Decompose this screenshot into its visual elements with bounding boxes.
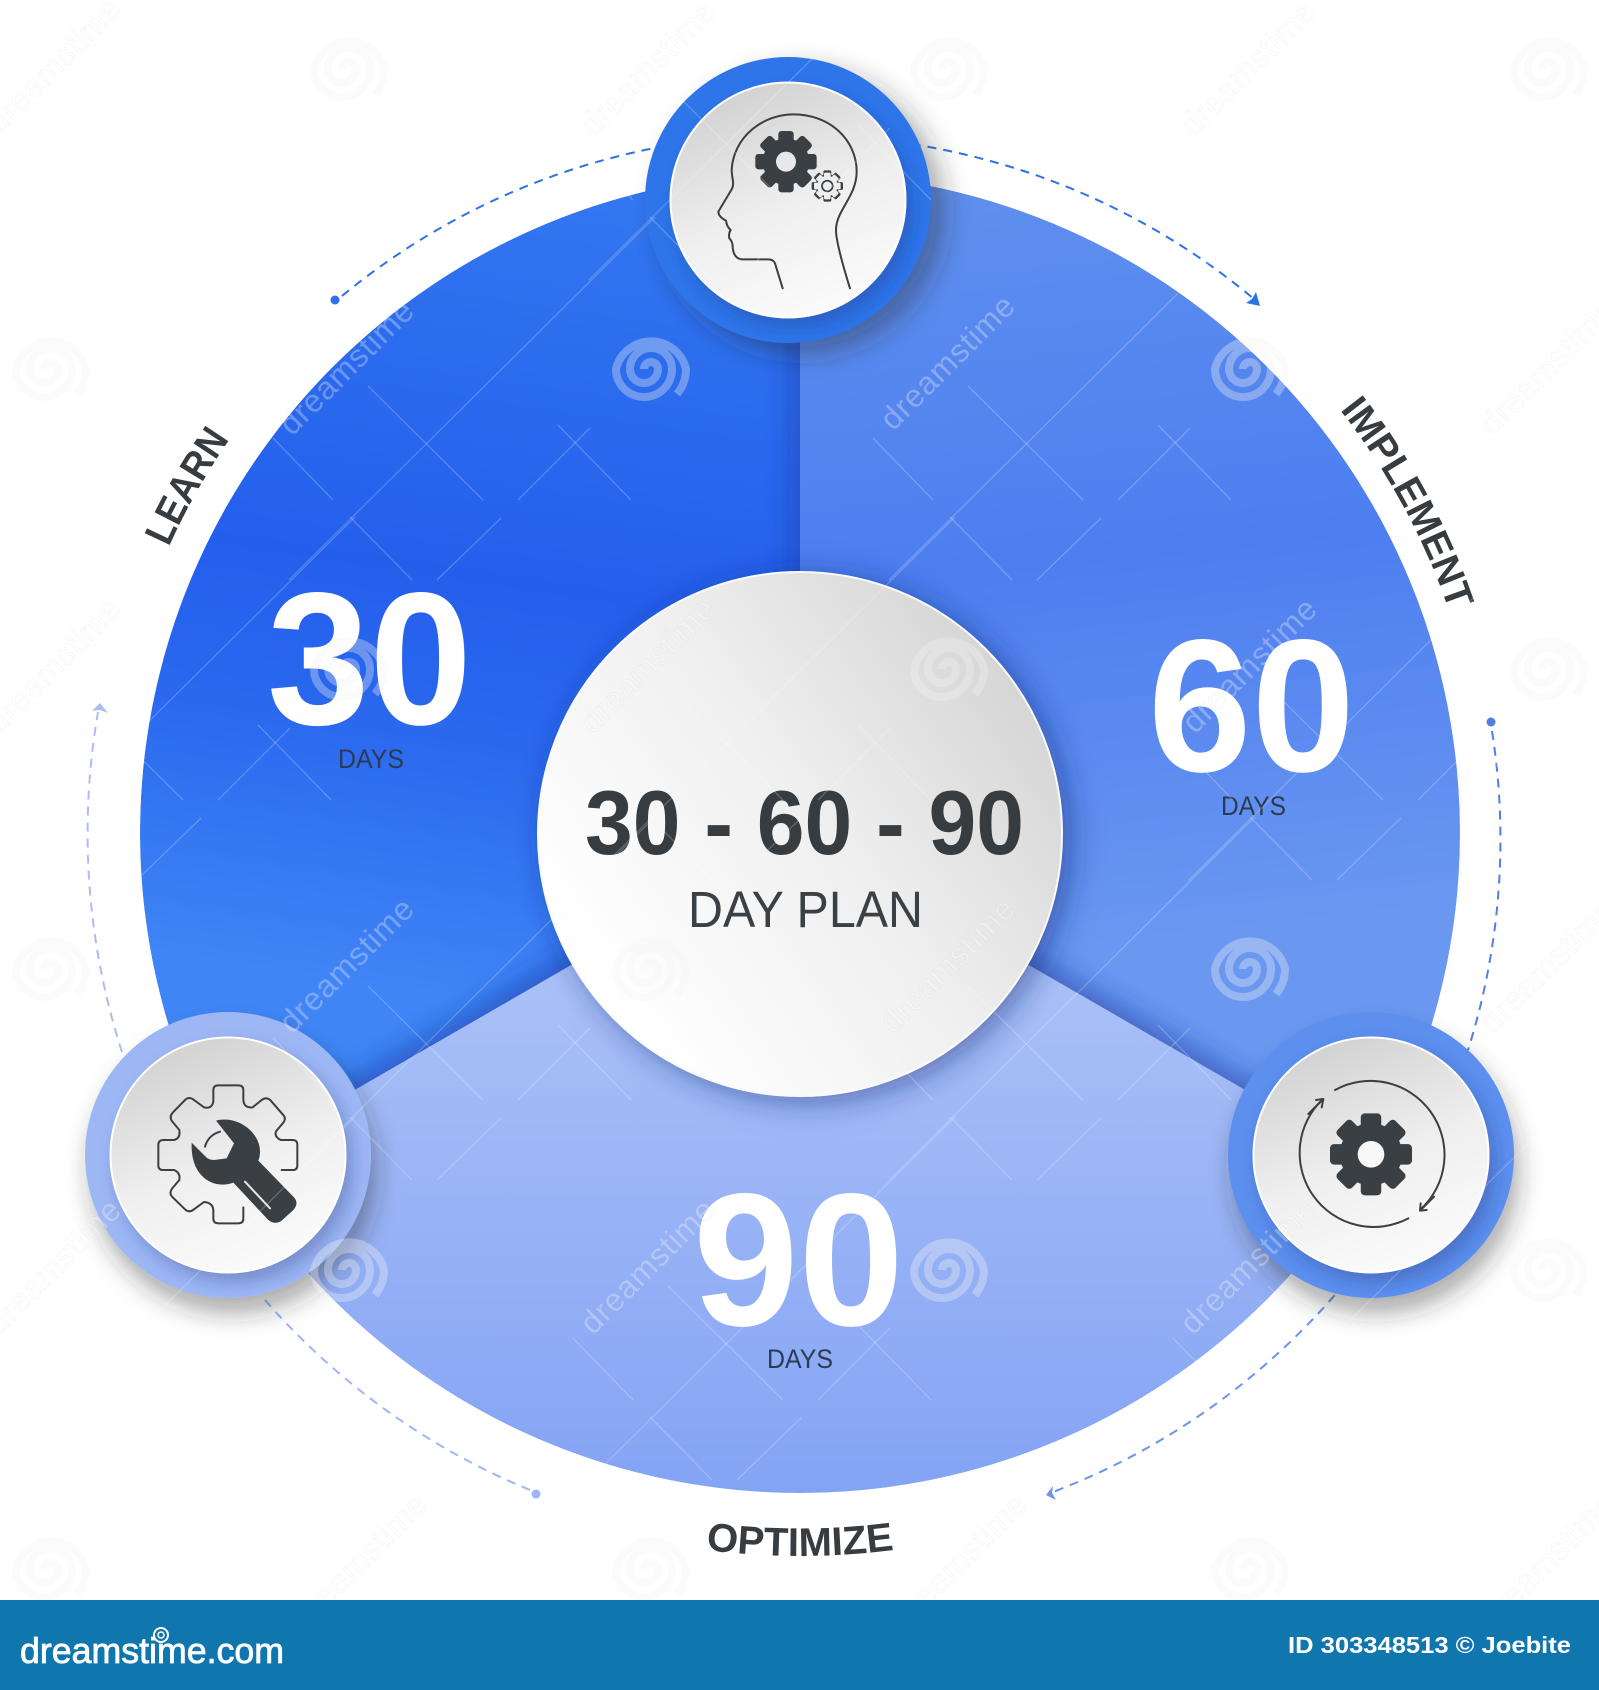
watermark: dreamstime text: dreamstime (885, 1486, 1034, 1635)
sector: implement 60 days (800, 173, 1460, 1163)
center circle with title (538, 572, 1062, 1097)
label: OPTIMIZE: OPTIMIZE (708, 1522, 893, 1556)
number block: 90 days: 90 (693, 1155, 904, 1366)
pie: three sectors (140, 173, 1460, 1493)
number block: 30 days: 30 (267, 554, 472, 765)
number block: 30 days: DAYS (338, 744, 404, 774)
footer banner (0, 1600, 1599, 1690)
watermark: dreamstime text: dreamstime (272, 293, 421, 442)
label: LEARN: LEARN (144, 426, 228, 545)
dashed arc with arrow: to implement (880, 140, 1260, 306)
dashed arc: optimize, bottom left (265, 1300, 540, 1498)
dashed arc with arrow: to optimize (1046, 1283, 1345, 1500)
label: IMPLEMENT: IMPLEMENT (1342, 395, 1474, 603)
watermark: dreamstime text: dreamstime (285, 1486, 434, 1635)
icon: gear with cycle arrows (1300, 1081, 1445, 1227)
watermark: dreamstime text: dreamstime (1175, 591, 1324, 740)
sector: learn 30 days (140, 173, 800, 1163)
number block: 60 days: DAYS (1221, 791, 1286, 821)
footer logo: dreamstime.com (20, 1630, 284, 1671)
dashed arc: implement, right (1468, 718, 1500, 1050)
badge: optimize, wrench in gear (85, 1012, 371, 1298)
icon: wrench and gear (158, 1085, 297, 1223)
badge: learn, head with gears (645, 57, 931, 343)
watermark: dreamstime text: dreamstime (873, 288, 1022, 437)
badge: implement, gear with rotation arrows (1228, 1012, 1514, 1298)
icon: head with gears (718, 114, 857, 288)
subtitle: DAY PLAN: DAY PLAN (688, 881, 923, 938)
number block: 60 days: 60 (1148, 601, 1355, 812)
title: 30 - 60 - 90: 30 - 60 - 90 (585, 773, 1024, 874)
footer credit: ID 303348513 © Joebite (1288, 1632, 1571, 1658)
dashed arc with arrow: to learn (88, 703, 122, 1052)
watermark: dreamstime text: dreamstime (272, 891, 421, 1040)
watermark: dreamstime text: dreamstime (573, 1192, 722, 1341)
watermark: dreamstime text: dreamstime (1173, 1192, 1322, 1341)
number block: 90 days: DAYS (767, 1344, 833, 1374)
sector: optimize 90 days (308, 948, 1292, 1493)
dashed arc: learn, top left (330, 147, 660, 304)
watermark: dreamstime text: dreamstime (873, 891, 1022, 1040)
watermark: dreamstime text: dreamstime (573, 591, 722, 740)
